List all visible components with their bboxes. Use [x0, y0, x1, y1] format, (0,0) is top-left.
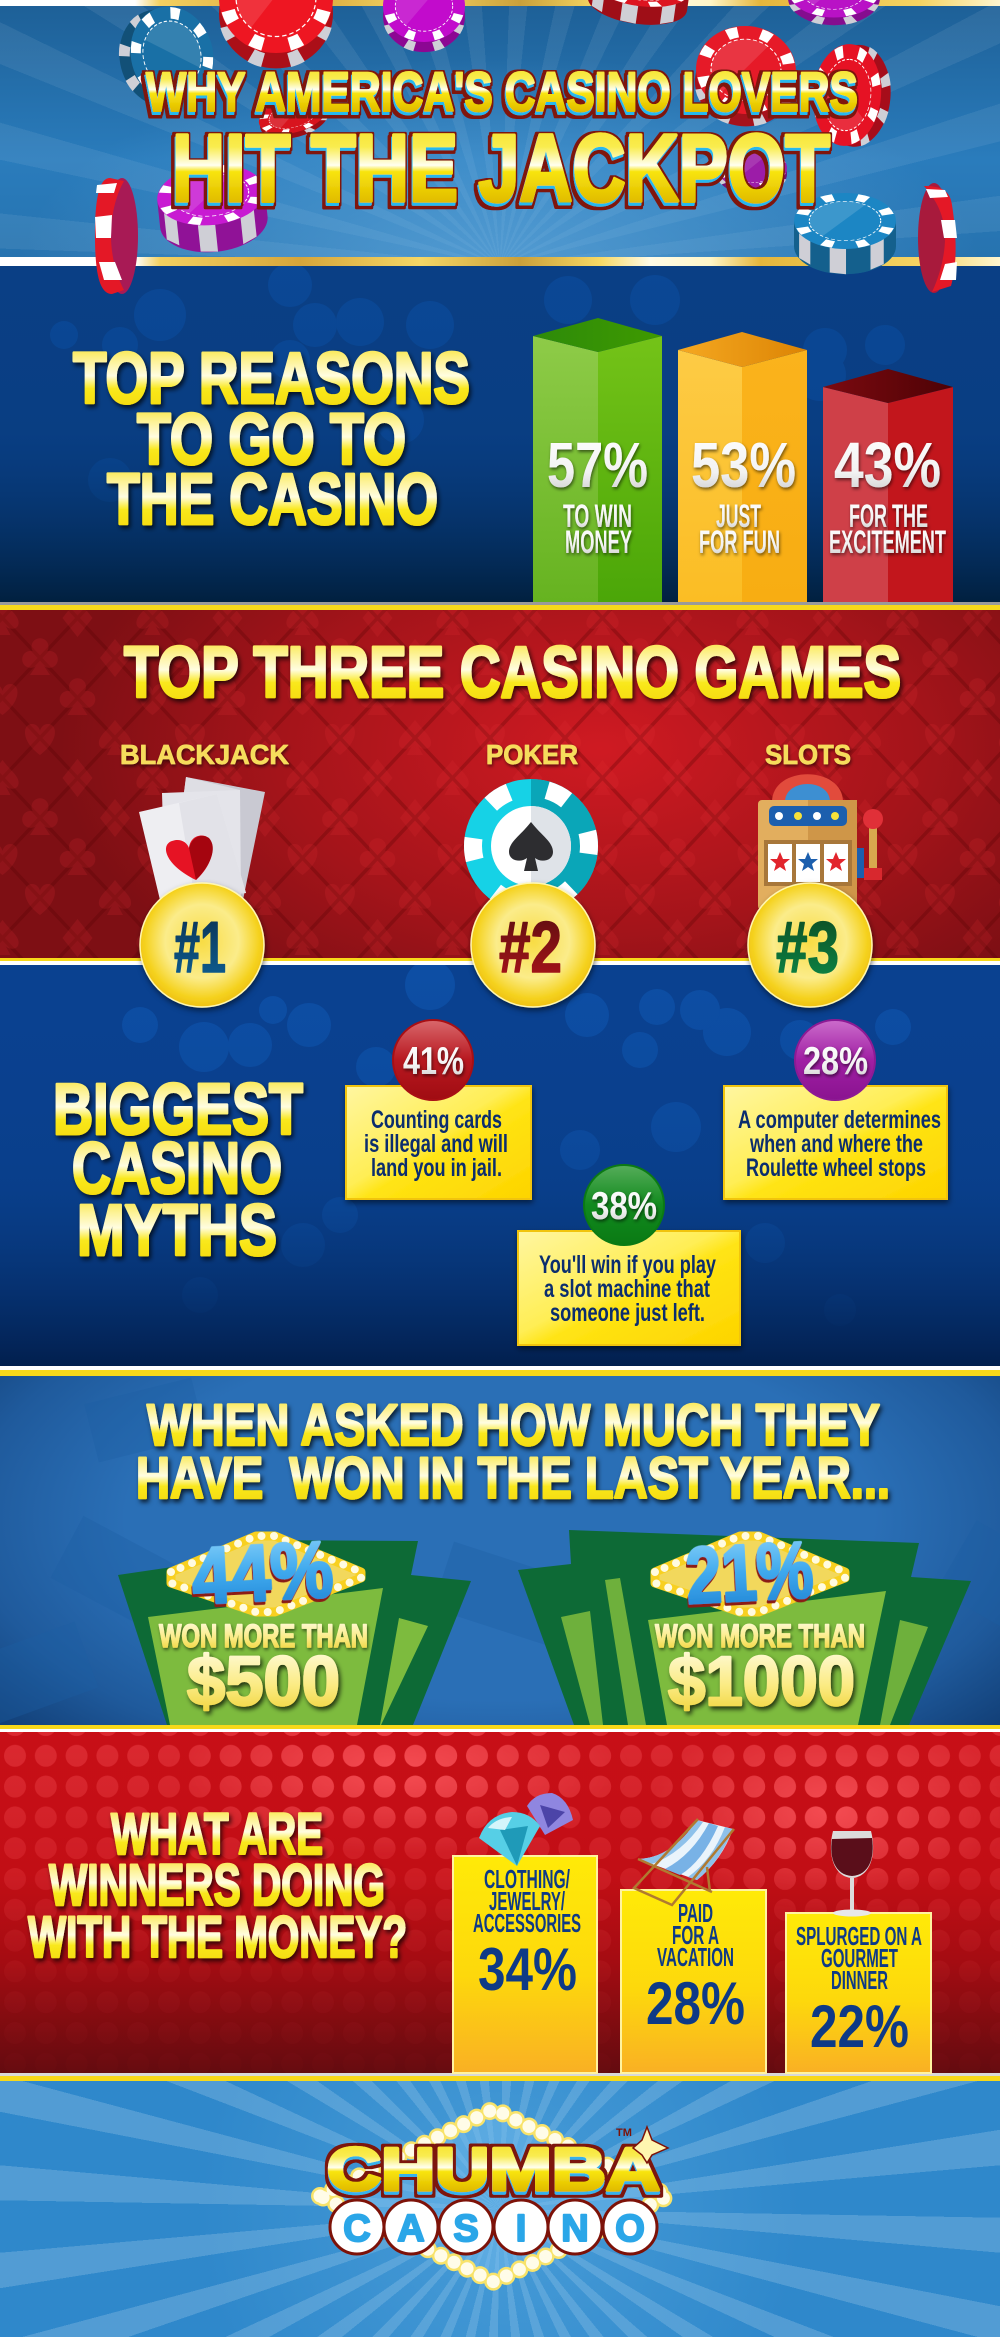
myth card 41%: 41% [403, 1040, 464, 1083]
stat: 21% won more than $1000: $1000 [668, 1642, 855, 1720]
icon: slot machine [758, 774, 883, 910]
stat: 21% won more than $1000: 21% [684, 1525, 815, 1620]
bar: paid for a vacation 28%: 28% [646, 1970, 745, 2037]
logo casino letters: C [343, 2208, 371, 2250]
heading: WINNERS DOING [49, 1853, 385, 1918]
logo casino letters: N [561, 2208, 589, 2250]
bar: to win money 57%: TO WIN [563, 498, 632, 534]
myth card 38%: a slot machine that [544, 1275, 710, 1303]
chips scattered [105, 0, 899, 274]
logo casino letters: A [397, 2208, 425, 2250]
myth card 41%: Counting cards [371, 1106, 502, 1134]
heading: TO GO TO [137, 400, 406, 480]
money stack right [518, 1530, 971, 1725]
badge: #2: #2 [499, 908, 562, 988]
icon: poker chip [461, 776, 601, 916]
icon: beach chair [634, 1819, 734, 1905]
badge: #1 [140, 883, 264, 1007]
panel: footer logo [0, 2081, 1000, 2337]
icon: diamonds [479, 1793, 573, 1866]
bar: splurged on a gourmet dinner 22% [786, 1913, 931, 2073]
bar: just for fun 53%: FOR FUN [699, 524, 780, 560]
icon: playing cards [139, 777, 265, 900]
badge: #3: #3 [776, 908, 839, 988]
heading: MYTHS [77, 1191, 277, 1271]
game label: blackjack: BLACKJACK [120, 739, 289, 770]
logo casino letters: S [453, 2208, 479, 2250]
panel: what winners do with the money [0, 1725, 1000, 2081]
stat: 21% won more than $1000: WON MORE THAN [655, 1618, 865, 1654]
chip on edge right [918, 183, 957, 293]
heading: WHAT ARE [111, 1802, 323, 1867]
heading [28, 1802, 407, 1970]
logo: Chumba Casino: CHUMBA [327, 2136, 660, 2203]
bar: paid for a vacation 28%: PAID [678, 1898, 713, 1928]
myth card 28% [724, 1020, 947, 1199]
logo casino letters: O [615, 2208, 645, 2250]
bar: to win money 57%: 57% [547, 429, 648, 501]
panel: biggest casino myths [0, 965, 1000, 1370]
myth card 28%: Roulette wheel stops [746, 1154, 926, 1182]
bar: clothing jewelry accessories 34%: 34% [478, 1936, 577, 2003]
panel: top reasons to go to the casino [0, 266, 1000, 602]
myth card 38%: someone just left. [550, 1299, 705, 1327]
logo casino letters [330, 2200, 657, 2254]
heading [73, 339, 470, 540]
bar: for the excitement 43%: FOR THE [849, 498, 928, 534]
bar: clothing jewelry accessories 34%: ACCESSORIES [473, 1908, 581, 1938]
bar: paid for a vacation 28% [621, 1890, 766, 2073]
myth card 38%: 38% [591, 1185, 657, 1228]
bar: clothing jewelry accessories 34% [453, 1856, 597, 2073]
heading [136, 1393, 890, 1511]
badge: #3 [748, 883, 872, 1007]
bar: splurged on a gourmet dinner 22%: DINNER [831, 1965, 888, 1995]
myth card 38% [518, 1165, 740, 1345]
title [146, 60, 858, 222]
bar: paid for a vacation 28%: VACATION [657, 1942, 734, 1972]
bar: paid for a vacation 28%: FOR A [672, 1920, 719, 1950]
bar: to win money 57% [533, 318, 662, 602]
bar: just for fun 53%: 53% [691, 429, 796, 501]
heading: BIGGEST [53, 1070, 303, 1150]
stat: 21% won more than $1000 [655, 1525, 865, 1720]
marquee left [171, 1536, 361, 1612]
bar: clothing jewelry accessories 34%: JEWELRY/ [489, 1886, 565, 1916]
myth card 38%: You'll win if you play [539, 1251, 716, 1279]
stat: 44% won more than $500: 44% [190, 1524, 335, 1621]
myth card 41% [346, 1020, 531, 1199]
myth card 28%: when and where the [749, 1130, 923, 1158]
logo casino letters: I [516, 2208, 526, 2250]
game label: poker: POKER [486, 739, 578, 770]
heading: WITH THE MONEY? [28, 1905, 407, 1970]
heading [53, 1070, 303, 1271]
trademark: TM [616, 2127, 632, 2139]
money stack left [118, 1540, 471, 1725]
bar: clothing jewelry accessories 34%: CLOTHING/ [484, 1864, 570, 1894]
bar: just for fun 53%: JUST [716, 498, 761, 534]
marquee right [655, 1536, 845, 1612]
bar: to win money 57%: MONEY [565, 524, 632, 560]
heading: TOP REASONS [73, 339, 470, 419]
myth card 41%: land you in jail. [371, 1154, 502, 1182]
panel: top three casino games [0, 605, 1000, 965]
bar: splurged on a gourmet dinner 22%: GOURMET [821, 1943, 898, 1973]
badge: #2 [471, 883, 595, 1007]
stat: 44% won more than $500 [159, 1524, 368, 1720]
panel: how much they won [0, 1370, 1000, 1725]
heading: THE CASINO [107, 460, 438, 540]
icon: wine glass [831, 1831, 873, 1916]
bar: just for fun 53% [678, 332, 807, 602]
bar: for the excitement 43% [823, 369, 953, 602]
logo: Chumba Casino [320, 2109, 668, 2282]
panel: hero header [0, 0, 1000, 266]
chip on edge left [95, 178, 138, 294]
myth card 41%: is illegal and will [364, 1130, 508, 1158]
bar: for the excitement 43%: 43% [834, 429, 941, 501]
bar: splurged on a gourmet dinner 22%: 22% [810, 1993, 909, 2060]
badge: #1: #1 [174, 908, 226, 988]
logo star [633, 2127, 668, 2163]
game label: slots: SLOTS [765, 739, 851, 770]
stat: 44% won more than $500: $500 [187, 1642, 340, 1720]
stat: 44% won more than $500: WON MORE THAN [159, 1618, 368, 1654]
myth card 28%: 28% [803, 1040, 868, 1083]
heading: CASINO [72, 1129, 282, 1209]
